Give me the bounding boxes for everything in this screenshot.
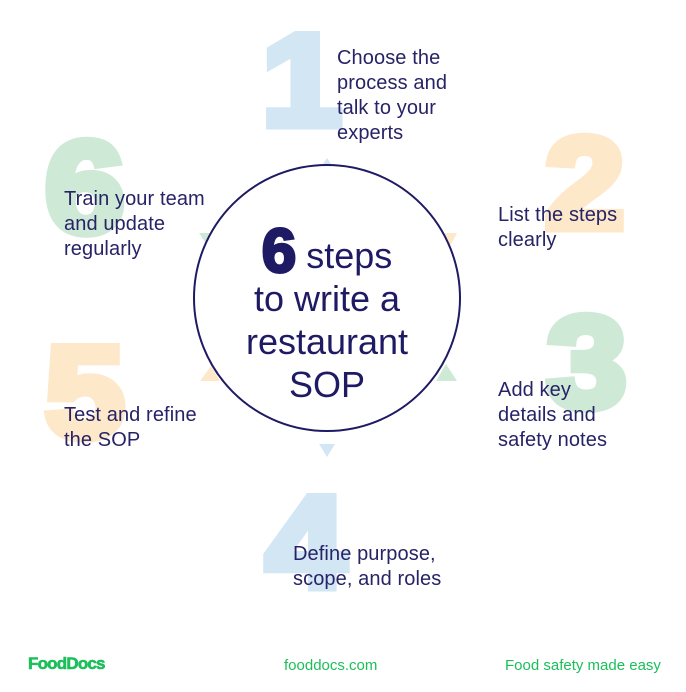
step 4 text: scope, and roles xyxy=(293,568,441,590)
step 3 text: Add key xyxy=(498,379,571,401)
step 5 text: the SOP xyxy=(64,429,140,451)
step 1 text: experts xyxy=(337,122,403,144)
step 4 text: Define purpose, xyxy=(293,543,436,565)
step 6 text xyxy=(64,188,205,260)
step 4 text xyxy=(293,543,441,590)
big number 2: 2 xyxy=(545,110,625,256)
step 3 text: details and xyxy=(498,404,596,426)
step 6 text: and update xyxy=(64,213,165,235)
footer url: fooddocs.com xyxy=(284,657,377,674)
footer tagline: Food safety made easy xyxy=(505,657,661,674)
big number 5: 5 xyxy=(45,319,125,465)
step 6 text: regularly xyxy=(64,238,142,260)
step 5 text: Test and refine xyxy=(64,404,197,426)
big number 4: 4 xyxy=(266,469,346,615)
center circle xyxy=(194,165,460,431)
step 1 text: Choose the xyxy=(337,47,440,69)
step 1 text: talk to your xyxy=(337,97,436,119)
big number 6: 6 xyxy=(45,114,125,260)
footer logo: FoodDocs xyxy=(28,654,105,673)
center title: 6 steps xyxy=(262,217,392,286)
step 2 text: List the steps xyxy=(498,204,617,226)
step 5 text xyxy=(64,404,197,451)
big number 1: 1 xyxy=(262,7,342,153)
step 2 text: clearly xyxy=(498,229,556,251)
center title: to write a xyxy=(254,278,400,319)
center title: restaurant xyxy=(246,321,408,362)
step 3 text xyxy=(498,379,607,451)
step 6 text: Train your team xyxy=(64,188,205,210)
triangle markers xyxy=(199,158,457,457)
big number 3: 3 xyxy=(547,289,627,435)
step 1 text: process and xyxy=(337,72,447,94)
step 2 text xyxy=(498,204,617,251)
step 1 text xyxy=(337,47,447,144)
center title: SOP xyxy=(289,364,365,405)
center title xyxy=(246,217,408,405)
step 3 text: safety notes xyxy=(498,429,607,451)
